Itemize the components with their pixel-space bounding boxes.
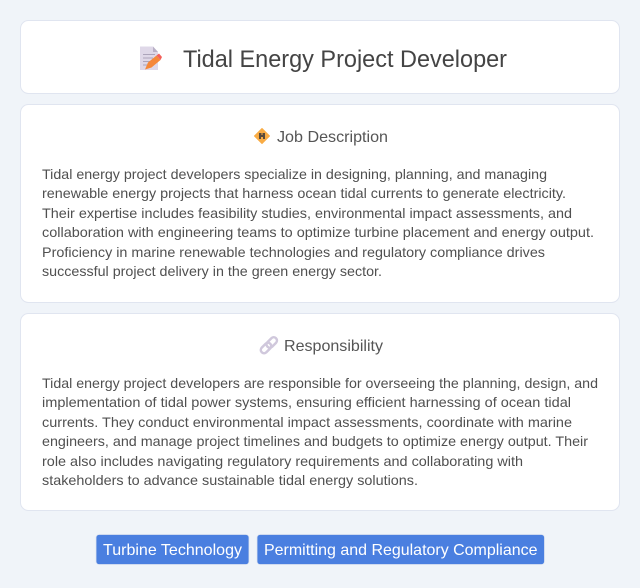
heading: responsibility: Responsibility	[284, 338, 383, 355]
text block: responsibility	[42, 375, 598, 488]
text block: job description: Proficiency in marine renewable technologies and regulatory compliance drives	[42, 244, 545, 260]
text block: responsibility: role also includes navigating regulatory requirements and collaborating with	[42, 453, 523, 469]
panel: job description	[20, 104, 620, 302]
tag: turbine technology	[96, 534, 249, 564]
text block: responsibility: Tidal energy project developers are responsible for overseeing the planning, design, and	[42, 375, 598, 391]
icon: memo with pencil	[140, 46, 162, 70]
text block: responsibility: implementation of tidal power systems, ensuring efficient harnessing of ocean tidal	[42, 394, 571, 410]
icon: orange diamond	[254, 128, 270, 144]
tag: turbine technology: Turbine Technology	[103, 542, 242, 559]
text block: job description	[42, 166, 594, 279]
text block: responsibility: engineers, and manage project timelines and budgets to optimize energy output. Their	[42, 433, 588, 449]
tag: permitting and regulatory compliance	[257, 534, 544, 564]
text block: responsibility: currents. They conduct environmental impact assessments, coordinate with marine	[42, 414, 572, 430]
text block: job description: collaboration with engineering teams to optimize turbine placement and energy output.	[42, 224, 594, 240]
icon: chain link	[259, 336, 278, 355]
heading: job description: Job Description	[277, 129, 388, 146]
title: Tidal Energy Project Developer	[183, 46, 507, 73]
panel: header	[20, 20, 620, 94]
text block: job description: Their expertise includes feasibility studies, environmental impact assessments, and	[42, 205, 572, 221]
text block: job description: Tidal energy project developers specialize in designing, planning, and managing	[42, 166, 547, 182]
panel: responsibility	[20, 314, 620, 510]
text block: responsibility: stakeholders to advance sustainable tidal energy solutions.	[42, 472, 418, 488]
text block: job description: successful project delivery in the green energy sector.	[42, 263, 382, 279]
text block: job description: renewable energy projects that harness ocean tidal currents to generate electricity.	[42, 185, 566, 201]
tag: permitting and regulatory compliance: Permitting and Regulatory Compliance	[264, 542, 538, 559]
